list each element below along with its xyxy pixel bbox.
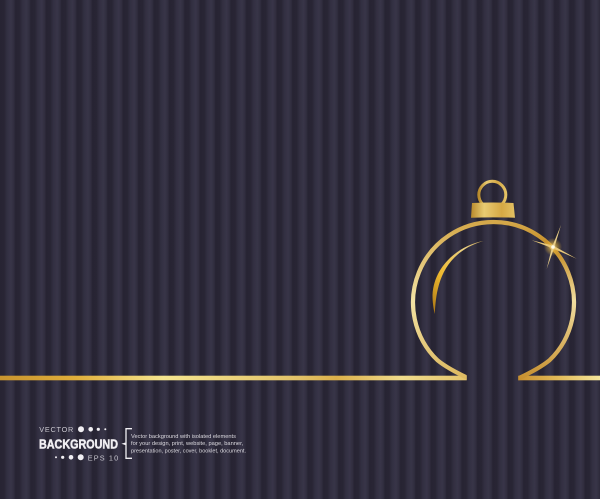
ornament cap [471, 202, 515, 218]
sparkle [532, 225, 577, 269]
caption description: Vector background with isolated elements [131, 434, 236, 440]
caption logo [39, 425, 118, 462]
caption description: presentation, poster, cover, booklet, document. [131, 448, 246, 454]
ornament highlight [432, 241, 484, 314]
caption description [131, 434, 246, 454]
caption description: for your design, print, website, page, banner, [131, 441, 244, 447]
word: EPS 10: EPS 10 [88, 454, 118, 462]
word: BACKGROUND: BACKGROUND [39, 436, 118, 452]
ornament outline [413, 222, 574, 380]
illustration: gold ornament line art and caption [0, 180, 600, 460]
bracket [124, 429, 132, 458]
gold baseline [0, 376, 600, 380]
dots row top [78, 426, 106, 432]
line shadow [0, 379, 600, 382]
dots row bottom [55, 454, 84, 460]
word: VECTOR: VECTOR [39, 425, 73, 434]
ornament ring [479, 181, 506, 208]
